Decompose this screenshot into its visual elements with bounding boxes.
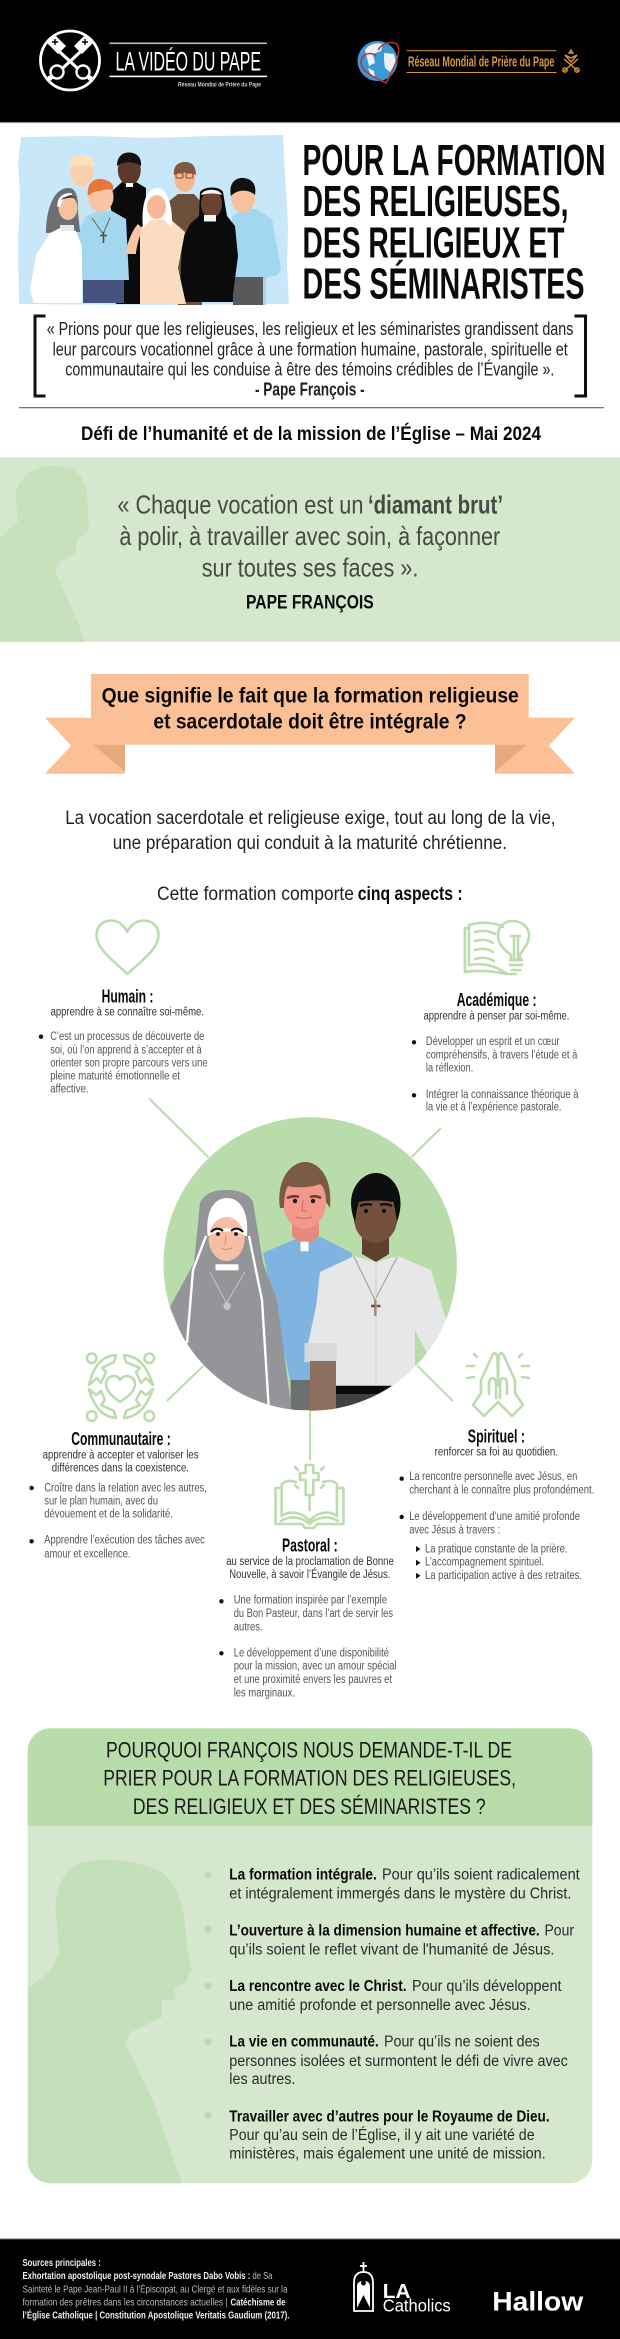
reason: dimension humaine bbox=[204, 1922, 574, 1958]
reason: formation intégrale bbox=[204, 1866, 580, 1902]
silhouette of Pope bbox=[0, 466, 89, 642]
man with red hair bbox=[77, 179, 129, 303]
quote text: « Chaque vocation est un bbox=[117, 489, 363, 519]
quote text bbox=[117, 489, 503, 613]
aspect: Pastoral: autres. bbox=[234, 1621, 263, 1633]
quote with brackets: - Pape François - bbox=[255, 380, 365, 400]
silhouette of Pope bbox=[28, 1853, 191, 2184]
sources: Sources principales : bbox=[22, 2258, 101, 2269]
quote text: ‘diamant brut’ bbox=[368, 489, 503, 519]
aspect: Spirituel: La pratique constante de la prière. bbox=[425, 1543, 567, 1555]
young seminarian bbox=[230, 178, 281, 305]
aspect: Humain bbox=[39, 920, 208, 1096]
monk with glasses bbox=[168, 162, 203, 305]
reason: rencontre avec le Christ: La rencontre avec le Christ. bbox=[229, 1978, 406, 1995]
aspect: Communautaire: sur le plan humain, avec du bbox=[44, 1496, 158, 1508]
aspect: Pastoral: pour la mission, avec un amour spécial bbox=[234, 1661, 397, 1673]
aspect: Académique bbox=[412, 921, 579, 1114]
sources: l’Église Catholique | Constitution Apostolique Veritatis Gaudium (2017). bbox=[22, 2309, 290, 2322]
ribbon heading bbox=[45, 674, 575, 774]
black nun bbox=[180, 188, 238, 302]
reason: dimension humaine: L’ouverture à la dimension humaine et affective. bbox=[229, 1922, 540, 1939]
aspect: Communautaire bbox=[29, 1354, 207, 1560]
logo: LA Catholics: LA bbox=[383, 2281, 410, 2303]
nun bbox=[170, 1190, 293, 1420]
aspect: Académique: la réflexion. bbox=[426, 1063, 473, 1075]
aspect: Humain: apprendre à se connaître soi-même. bbox=[51, 1007, 204, 1019]
aspect: Communautaire: Apprendre l’exécution des tâches avec bbox=[44, 1535, 205, 1547]
aspect: Spirituel: L’accompagnement spirituel. bbox=[425, 1557, 544, 1569]
reason: vie en communauté bbox=[204, 2034, 568, 2088]
panel heading: PRIER POUR LA FORMATION DES RELIGIEUSES, bbox=[103, 1766, 516, 1791]
quote text: à polir, à travailler avec soin, à façonner bbox=[119, 521, 500, 551]
reason: dimension humaine: qu’ils soient le reflet vivant de l'humanité de Jésus. bbox=[229, 1941, 554, 1958]
black priest bbox=[108, 152, 146, 304]
aspect: Humain: affective. bbox=[50, 1084, 89, 1096]
logo title: La Vidéo du Pape bbox=[110, 42, 267, 89]
sources: Exhortation apostolique post-synodale Pastores Dabo Vobis : bbox=[22, 2271, 250, 2282]
panel heading bbox=[103, 1738, 516, 1819]
logo: Hallow: Hallow bbox=[492, 2287, 584, 2317]
footer band bbox=[0, 2238, 620, 2339]
aspect: Pastoral: et une proximité envers les pauvres et bbox=[234, 1674, 393, 1686]
logo: globe and heart bbox=[358, 41, 399, 83]
sources: Sainteté le Pape Jean-Paul II à l’Épiscopat, au Clergé et aux fidèles sur la bbox=[22, 2282, 288, 2295]
aspect: Communautaire: dévouement et de la solidarité. bbox=[44, 1509, 173, 1521]
aspect: Académique: apprendre à penser par soi-même. bbox=[424, 1010, 569, 1022]
reason: vie en communauté: personnes isolées et surmontent le défi de vivre avec bbox=[229, 2053, 568, 2070]
icon: praying hands bbox=[467, 1353, 529, 1416]
aspect: Spirituel: avec Jésus à travers : bbox=[409, 1524, 500, 1536]
aspect: Spirituel: renforcer sa foi au quotidien. bbox=[435, 1447, 558, 1459]
aspect: Académique: Académique : bbox=[457, 990, 537, 1010]
sources: de Sa bbox=[252, 2271, 273, 2282]
ribbon heading: et sacerdotale doit être intégrale ? bbox=[153, 710, 467, 733]
aspect: Humain: C’est un processus de découverte de bbox=[50, 1031, 204, 1043]
reason: formation intégrale: La formation intégrale. bbox=[229, 1866, 377, 1883]
intro paragraph: La vocation sacerdotale et religieuse exige, tout au long de la vie, bbox=[65, 808, 555, 829]
subheading: five aspects: cinq aspects : bbox=[358, 884, 463, 905]
aspect: Communautaire: apprendre à accepter et valoriser les bbox=[43, 1449, 199, 1461]
panel: Pope quote bbox=[0, 457, 620, 642]
title bbox=[302, 136, 606, 308]
aspect: Humain: pleine maturité émotionnelle et bbox=[50, 1070, 181, 1082]
aspect: Humain: Humain : bbox=[102, 987, 153, 1007]
reason: rencontre avec le Christ: une amitié profonde et personnelle avec Jésus. bbox=[229, 1997, 531, 2014]
illustration: group of religious people bbox=[18, 135, 289, 305]
reason: formation intégrale: Pour qu’ils soient radicalement bbox=[382, 1866, 580, 1883]
aspect: Académique: Développer un esprit et un cœur bbox=[426, 1036, 560, 1048]
aspect: Spirituel: Le développement d’une amitié profonde bbox=[409, 1511, 580, 1523]
aspect: Pastoral bbox=[219, 1465, 397, 1699]
aspect: Spirituel: La rencontre personnelle avec Jésus, en bbox=[409, 1471, 577, 1483]
reason: vie en communauté: Pour qu’ils ne soient des bbox=[384, 2034, 540, 2051]
intro paragraph bbox=[65, 808, 555, 854]
connector lines bbox=[149, 1098, 453, 1460]
layman with cross necklace bbox=[304, 1173, 447, 1414]
aspect: Pastoral: les marginaux. bbox=[234, 1687, 295, 1699]
central circle with nun, priest and layman bbox=[164, 1117, 457, 1420]
aspect: Communautaire: Croître dans la relation avec les autres, bbox=[44, 1482, 207, 1494]
panel heading: POURQUOI FRANÇOIS NOUS DEMANDE-T-IL DE bbox=[106, 1738, 512, 1763]
reason: vie en communauté: les autres. bbox=[229, 2071, 295, 2088]
reason: travailler avec d'autres bbox=[204, 2108, 550, 2162]
sources bbox=[22, 2258, 290, 2322]
panel: why Francis asks bbox=[28, 1728, 592, 2184]
reason: travailler avec d'autres: ministères, mais également une unité de mission. bbox=[229, 2145, 546, 2162]
reason: rencontre avec le Christ bbox=[204, 1978, 562, 2014]
aspect: Pastoral: Le développement d’une disponibilité bbox=[234, 1648, 389, 1660]
priest bbox=[263, 1162, 352, 1410]
subtitle: month: Défi de l’humanité et de la mission de l’Église – Mai 2024 bbox=[81, 423, 541, 445]
nun in peach bbox=[126, 188, 186, 304]
icon: Vatican keys bbox=[563, 50, 579, 72]
aspect: Académique: Intégrer la connaissance théorique à bbox=[426, 1089, 579, 1101]
aspect: Humain: orienter son propre parcours vers une bbox=[50, 1058, 208, 1070]
aspect: Académique: compréhensifs, à travers l’étude et à bbox=[426, 1049, 578, 1061]
aspect: Pastoral: Une formation inspirée par l’exemple bbox=[234, 1595, 387, 1607]
aspect: Pastoral: Pastoral : bbox=[282, 1536, 338, 1556]
aspect: Pastoral: au service de la proclamation de Bonne bbox=[226, 1556, 394, 1568]
aspect: Communautaire: amour et excellence. bbox=[44, 1548, 130, 1560]
aspect: Académique: la vie et à l’expérience pastorale. bbox=[426, 1102, 562, 1114]
icon: book and light bulb bbox=[465, 921, 529, 974]
aspect: Pastoral: du Bon Pasteur, dans l’art de servir les bbox=[234, 1608, 393, 1620]
icon: community circle with heart bbox=[87, 1354, 154, 1421]
quote with brackets bbox=[35, 316, 586, 400]
aspect: Spirituel: Spirituel : bbox=[468, 1427, 525, 1447]
logo title: La Vidéo du Pape: LA VIDÉO DU PAPE bbox=[116, 47, 261, 77]
reason: vie en communauté: La vie en communauté. bbox=[229, 2034, 379, 2051]
subheading: five aspects: Cette formation comporte bbox=[157, 884, 354, 905]
reason: travailler avec d'autres: Travailler avec d’autres pour le Royaume de Dieu. bbox=[229, 2108, 550, 2125]
logo: LA Catholics bbox=[354, 2262, 451, 2316]
reason: dimension humaine: Pour bbox=[544, 1922, 574, 1939]
aspect: Spirituel bbox=[400, 1353, 594, 1582]
aspect: Spirituel: La participation active à des retraites. bbox=[425, 1570, 582, 1582]
aspect: Communautaire: Communautaire : bbox=[71, 1429, 171, 1449]
quote text: PAPE FRANÇOIS bbox=[246, 592, 374, 613]
logo: LA Catholics: Catholics bbox=[383, 2296, 451, 2316]
aspect: Communautaire: différences dans la coexistence. bbox=[52, 1462, 189, 1474]
aspect: Humain: soi, où l’on apprend à s’accepter et à bbox=[50, 1044, 202, 1056]
panel heading: DES RELIGIEUX ET DES SÉMINARISTES ? bbox=[133, 1794, 486, 1819]
reason: travailler avec d'autres: Pour qu’au sein de l’Église, il y ait une variété de bbox=[229, 2127, 535, 2144]
nun in white bbox=[30, 188, 82, 303]
reason: rencontre avec le Christ: Pour qu’ils développent bbox=[412, 1978, 562, 1995]
logo title: La Vidéo du Pape: Réseau Mondial de Prière du Pape bbox=[178, 82, 261, 89]
icon: open book with cross bbox=[276, 1465, 344, 1528]
sources: Catéchisme de bbox=[230, 2297, 286, 2308]
sources: formation des prêtres dans les circonstances actuelles | bbox=[22, 2297, 228, 2308]
logo: La Vidéo du Pape keys bbox=[40, 31, 100, 90]
icon: heart bbox=[96, 920, 158, 974]
intro paragraph: une préparation qui conduit à la maturité chrétienne. bbox=[113, 833, 507, 854]
reason: formation intégrale: et intégralement immergés dans le mystère du Christ. bbox=[229, 1885, 571, 1902]
aspect: Pastoral: Nouvelle, à savoir l’Évangile de Jésus. bbox=[229, 1568, 390, 1581]
ribbon heading: Que signifie le fait que la formation religieuse bbox=[102, 684, 519, 707]
header band bbox=[0, 0, 620, 123]
blond figure bbox=[70, 155, 102, 240]
quote text: sur toutes ses faces ». bbox=[202, 553, 418, 583]
